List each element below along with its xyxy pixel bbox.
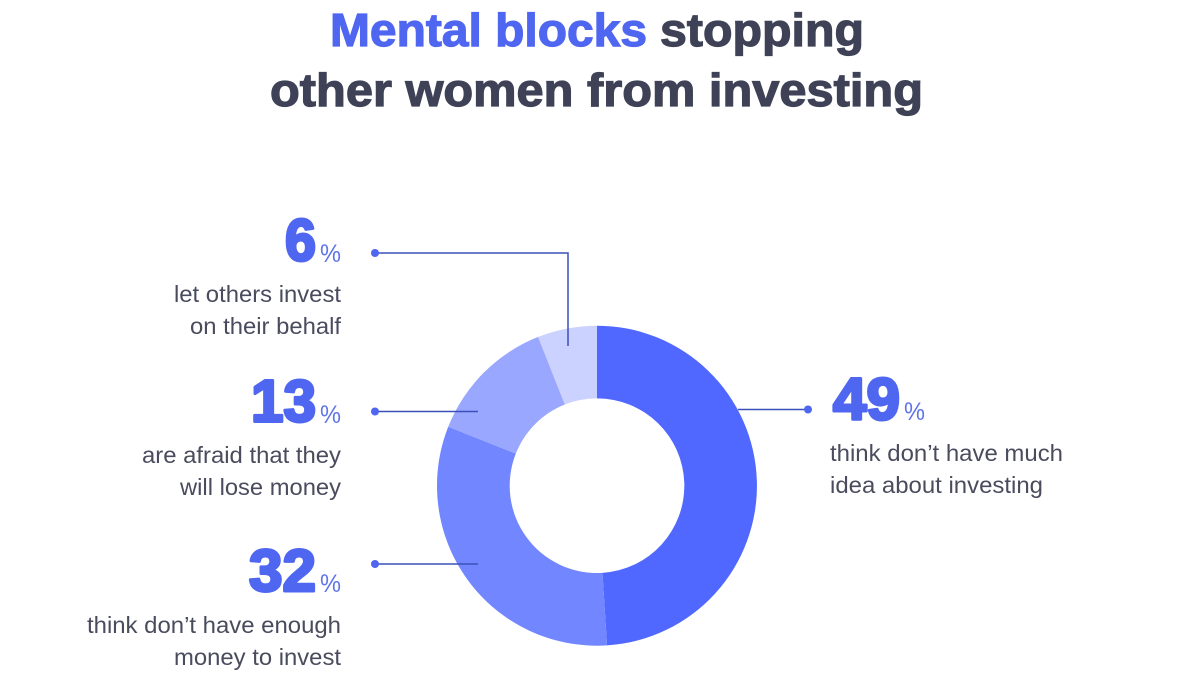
description: 32%: money to invest xyxy=(174,644,342,670)
value: 32%: 32 xyxy=(249,538,316,604)
description: 49%: idea about investing xyxy=(830,472,1043,498)
leader dot: 6% xyxy=(371,249,379,257)
slice: 49% xyxy=(597,326,757,645)
percent sign: 49%: % xyxy=(904,398,925,426)
description: 13% xyxy=(142,442,342,500)
description: 13%: will lose money xyxy=(179,474,342,500)
description: 13%: are afraid that they xyxy=(142,442,342,468)
value: 6%: 6 xyxy=(285,208,316,274)
donut chart xyxy=(437,326,757,646)
description: 6%: let others invest xyxy=(174,281,342,307)
percent sign: 13%: % xyxy=(320,401,341,429)
value: 13%: 13 xyxy=(251,368,316,434)
title: other women from investing xyxy=(270,64,923,116)
description: 32%: think don’t have enough xyxy=(87,612,341,638)
callout: 32% xyxy=(87,538,478,670)
slice: 32% xyxy=(437,427,607,646)
leader line: 32% xyxy=(375,563,478,565)
leader dot: 32% xyxy=(371,560,379,568)
percent sign: 32%: % xyxy=(320,570,341,598)
title: stopping xyxy=(660,4,864,56)
description: 49% xyxy=(830,440,1063,498)
description: 32% xyxy=(87,612,342,670)
description: 49%: think don’t have much xyxy=(830,440,1063,466)
value: 49%: 49 xyxy=(833,366,900,432)
title: Mental blocks xyxy=(330,4,647,56)
callout: 49% xyxy=(738,366,1063,498)
leader line: 49% xyxy=(738,408,808,410)
description: 6% xyxy=(174,281,342,339)
percent sign: 6%: % xyxy=(320,240,341,268)
slice: 6% xyxy=(538,326,597,405)
callout: 6% xyxy=(174,208,568,346)
leader line: 13% xyxy=(375,410,478,412)
leader dot: 13% xyxy=(371,408,379,416)
title xyxy=(270,4,923,116)
leader line: 6% xyxy=(375,253,568,346)
callout: 13% xyxy=(142,368,478,500)
leader dot: 49% xyxy=(804,406,812,414)
slice: 13% xyxy=(448,337,565,454)
description: 6%: on their behalf xyxy=(190,313,342,339)
